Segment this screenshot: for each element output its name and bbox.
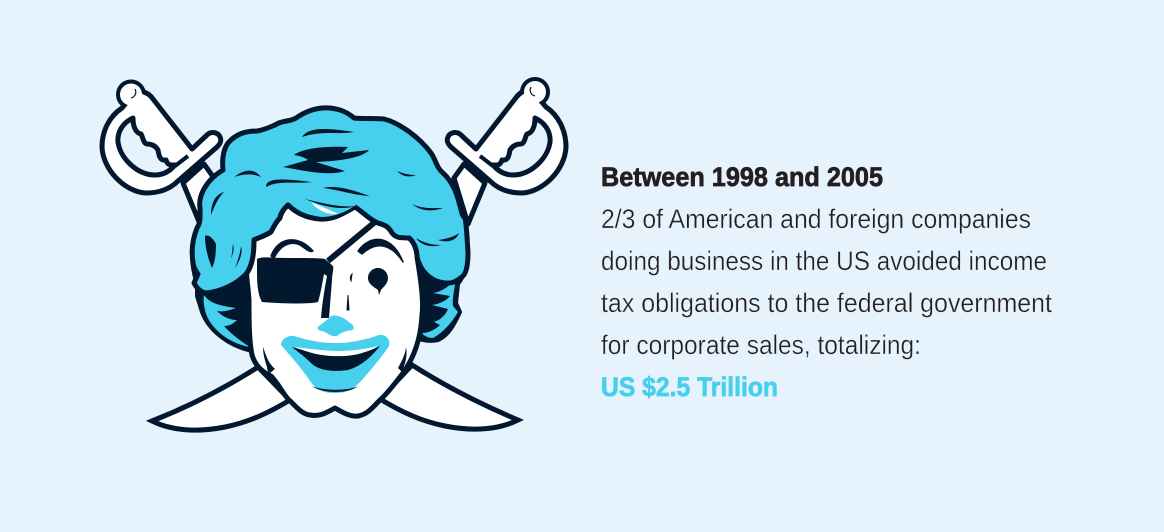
blue hair fringe — [291, 195, 356, 217]
face — [247, 205, 423, 416]
eye patch strap — [328, 222, 375, 261]
hair strands — [205, 129, 459, 268]
body text — [601, 204, 1052, 360]
highlighted total: US $2.5 Trillion — [601, 372, 778, 402]
mouth interior — [292, 346, 380, 371]
mouth lips — [281, 335, 389, 393]
right cheek line — [398, 347, 407, 372]
nose — [318, 315, 354, 336]
icon: pirate clown head — [192, 108, 468, 416]
left cheek line — [263, 347, 275, 373]
teeth — [294, 346, 378, 356]
icon: right blade — [380, 365, 518, 429]
text block — [601, 162, 1052, 402]
body text: 2/3 of American and foreign companies — [601, 204, 1031, 234]
lower right hair stripes — [422, 284, 458, 338]
left eyebrow — [271, 240, 313, 258]
eye patch — [257, 257, 333, 318]
nose lines — [347, 274, 352, 310]
right eyebrow — [358, 239, 403, 262]
white hair fringe highlight — [311, 202, 338, 214]
body text: doing business in the US avoided income — [601, 246, 1047, 276]
lower left hair stripes — [204, 295, 250, 347]
heading: Between 1998 and 2005 — [601, 162, 883, 192]
body text: tax obligations to the federal government — [601, 288, 1052, 318]
hair back and side shadow — [192, 250, 468, 351]
icon: right sword — [447, 80, 566, 224]
body text: for corporate sales, totalizing: — [601, 330, 921, 360]
hair main mass — [192, 108, 468, 293]
icon: left sword — [102, 82, 221, 224]
right eye — [368, 268, 388, 295]
icon: left blade — [152, 367, 290, 430]
lower lip shadow — [312, 386, 358, 392]
